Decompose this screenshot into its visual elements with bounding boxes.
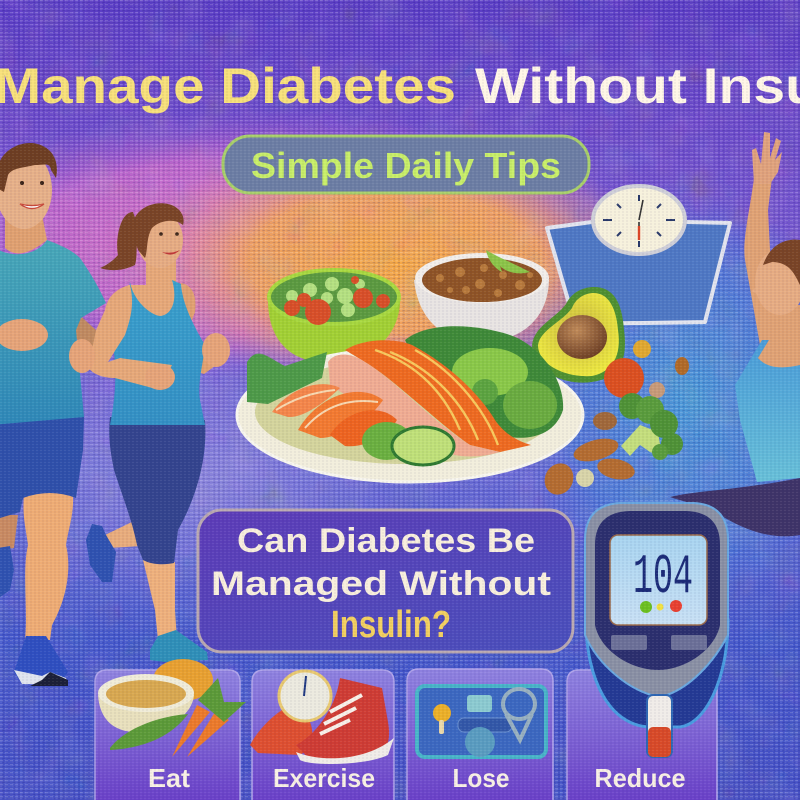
t-shirt	[0, 240, 106, 425]
illustration: avocado	[532, 287, 625, 383]
head	[752, 240, 800, 315]
illustration: salad bowl	[268, 270, 400, 363]
cucumbers	[362, 422, 412, 460]
glucose meter	[585, 503, 728, 757]
lower body	[586, 620, 728, 727]
leggings	[109, 417, 205, 564]
card: eat	[95, 659, 246, 800]
card: lose	[407, 669, 553, 800]
back leg	[0, 515, 18, 550]
tank top	[735, 340, 800, 482]
buttons	[611, 635, 647, 650]
neck	[128, 258, 184, 318]
card: exercise	[250, 670, 394, 800]
fists	[145, 364, 175, 390]
illustration: woman jogging	[85, 203, 230, 662]
question box: Insulin?	[331, 604, 451, 646]
back shoe	[86, 524, 116, 582]
illustration: plate of salmon	[237, 326, 583, 482]
label: Reduce	[594, 763, 686, 793]
title: Manage Diabetes	[0, 58, 456, 114]
leg	[670, 478, 800, 536]
greens	[247, 326, 563, 438]
salmon fillet	[345, 340, 531, 452]
screen	[610, 535, 707, 625]
card: reduce	[567, 670, 717, 800]
back calf	[105, 518, 142, 548]
illustration: tomato, nuts and broccoli	[540, 340, 689, 499]
head	[0, 143, 57, 229]
title: Without Insu	[475, 58, 800, 114]
neck and chest	[758, 305, 800, 367]
screen: 104	[633, 545, 693, 609]
grey shell	[585, 503, 728, 697]
label: Eat	[148, 763, 190, 793]
front leg	[143, 560, 177, 640]
label: Exercise	[273, 763, 375, 793]
neck	[5, 215, 47, 253]
front leg	[23, 492, 73, 640]
label: Lose	[452, 763, 510, 793]
upper arm	[75, 312, 96, 350]
back shoe	[0, 546, 14, 597]
left arm	[85, 285, 172, 390]
ponytail	[100, 212, 140, 270]
question box: Can Diabetes Be	[237, 522, 535, 560]
icon: sneakers and stopwatch	[250, 671, 394, 764]
subtitle pill	[223, 136, 589, 193]
subtitle pill: Simple Daily Tips	[251, 145, 561, 186]
icon: bowl and carrots	[98, 659, 246, 757]
broccoli	[619, 393, 683, 460]
dial	[593, 186, 685, 254]
raised arm	[744, 178, 785, 345]
illustration: woman stretching	[670, 132, 800, 536]
front shoe	[150, 630, 208, 662]
illustration: weight scale	[547, 186, 730, 324]
shorts	[0, 417, 84, 518]
dark face	[595, 511, 720, 670]
fists	[0, 319, 48, 351]
test strip	[647, 695, 672, 757]
hand	[752, 132, 782, 184]
title	[0, 58, 800, 114]
illustration: lentil bowl	[414, 250, 549, 342]
head	[132, 203, 184, 268]
slices	[272, 384, 340, 417]
front shoe	[14, 636, 68, 686]
icon: tray of tools	[417, 686, 546, 757]
tank top	[110, 280, 205, 425]
question box	[198, 510, 573, 652]
right shoulder and arm	[180, 283, 195, 325]
question box: Managed Without	[211, 565, 551, 603]
illustration: man jogging	[0, 143, 106, 686]
